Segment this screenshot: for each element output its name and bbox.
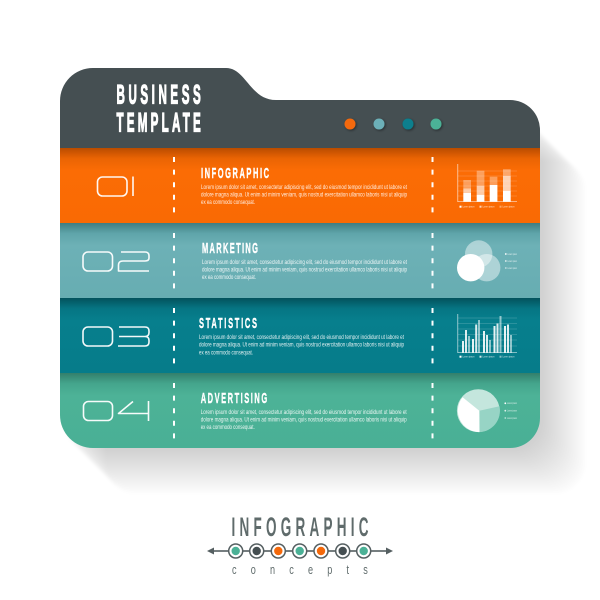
row 4 text: Lorem ipsum dolor sit amet, consectetur adipiscing elit, sed do eiusmod tempor incididunt ut labore et <box>201 409 407 416</box>
chart legend <box>460 206 514 209</box>
venn legend: Lorem ipsum <box>508 260 517 263</box>
grouped bar chart <box>458 314 517 359</box>
chart legend: Lorem ipsum <box>462 206 474 209</box>
number 03 <box>83 327 149 346</box>
title: BUSINESS <box>116 80 201 110</box>
folder body with coloured bands <box>55 60 545 448</box>
row 2 text: ex ea commodo consequat. <box>202 274 256 281</box>
chart legend: Lorem ipsum <box>462 356 474 359</box>
number 04 <box>84 401 149 421</box>
chart legend: Lorem ipsum <box>482 206 494 209</box>
pie legend <box>504 402 517 420</box>
row 1: infographic <box>98 157 517 215</box>
footer title: INFOGRAPHIC <box>232 512 368 542</box>
row 2 text: MARKETING <box>202 239 258 257</box>
chart legend: Lorem ipsum <box>502 356 514 359</box>
chart legend <box>460 356 514 359</box>
title <box>116 80 201 138</box>
footer subtitle: concepts <box>232 564 368 577</box>
row 3: statistics <box>83 308 517 365</box>
row 2 text: Lorem ipsum dolor sit amet, consectetur adipiscing elit, sed do eiusmod tempor incididunt ut labore et <box>202 259 407 266</box>
pie legend: Lorem ipsum <box>507 410 517 413</box>
row 1 text: dolore magna aliqua. Ut enim ad minim veniam, quis nostrud exercitation ullamco laboris nisi ut aliquip <box>201 191 407 198</box>
pie legend: Lorem ipsum <box>507 402 517 405</box>
long shadow <box>63 118 585 493</box>
row 1 text: Lorem ipsum dolor sit amet, consectetur adipiscing elit, sed do eiusmod tempor incididunt ut labore et <box>201 184 407 191</box>
row 3 text: ex ea commodo consequat. <box>199 349 253 356</box>
row 1 text <box>201 164 407 206</box>
chart legend: Lorem ipsum <box>502 206 514 209</box>
title: TEMPLATE <box>116 108 201 138</box>
stacked bar chart <box>458 164 517 209</box>
venn legend: Lorem ipsum <box>508 253 517 256</box>
venn legend <box>505 253 517 270</box>
row 4 text: ADVERTISING <box>201 389 267 407</box>
double arrow line <box>207 548 393 554</box>
row 4: advertising <box>84 383 517 440</box>
footer logo <box>207 512 393 577</box>
row 1 text: INFOGRAPHIC <box>201 164 269 182</box>
row 3 text: dolore magna aliqua. Ut enim ad minim veniam, quis nostrud exercitation ullamco laboris nisi ut aliquip <box>199 342 404 349</box>
row 2 text: dolore magna aliqua. Ut enim ad minim veniam, quis nostrud exercitation ullamco laboris nisi ut aliquip <box>202 266 407 274</box>
row 3 text <box>199 314 404 356</box>
pie legend: Lorem ipsum <box>507 417 517 420</box>
row 3 text: Lorem ipsum dolor sit amet, consectetur adipiscing elit, sed do eiusmod tempor incididunt ut labore et <box>199 334 404 341</box>
row 3 text: STATISTICS <box>199 314 257 332</box>
row 2: marketing <box>83 233 517 290</box>
row 1 text: ex ea commodo consequat. <box>201 199 255 206</box>
row 4 text <box>201 389 407 431</box>
venn legend: Lorem ipsum <box>508 267 517 270</box>
header dots <box>344 118 442 130</box>
number 01 <box>98 176 133 196</box>
pie chart <box>457 389 517 432</box>
chart legend: Lorem ipsum <box>482 356 494 359</box>
row 4 text: ex ea commodo consequat. <box>201 424 255 431</box>
row 4 text: dolore magna aliqua. Ut enim ad minim veniam, quis nostrud exercitation ullamco laboris nisi ut aliquip <box>201 416 407 424</box>
timeline dots <box>229 544 371 558</box>
infographic canvas <box>60 68 579 576</box>
venn diagram <box>457 240 517 281</box>
row 2 text <box>202 239 407 281</box>
number 02 <box>83 252 149 271</box>
